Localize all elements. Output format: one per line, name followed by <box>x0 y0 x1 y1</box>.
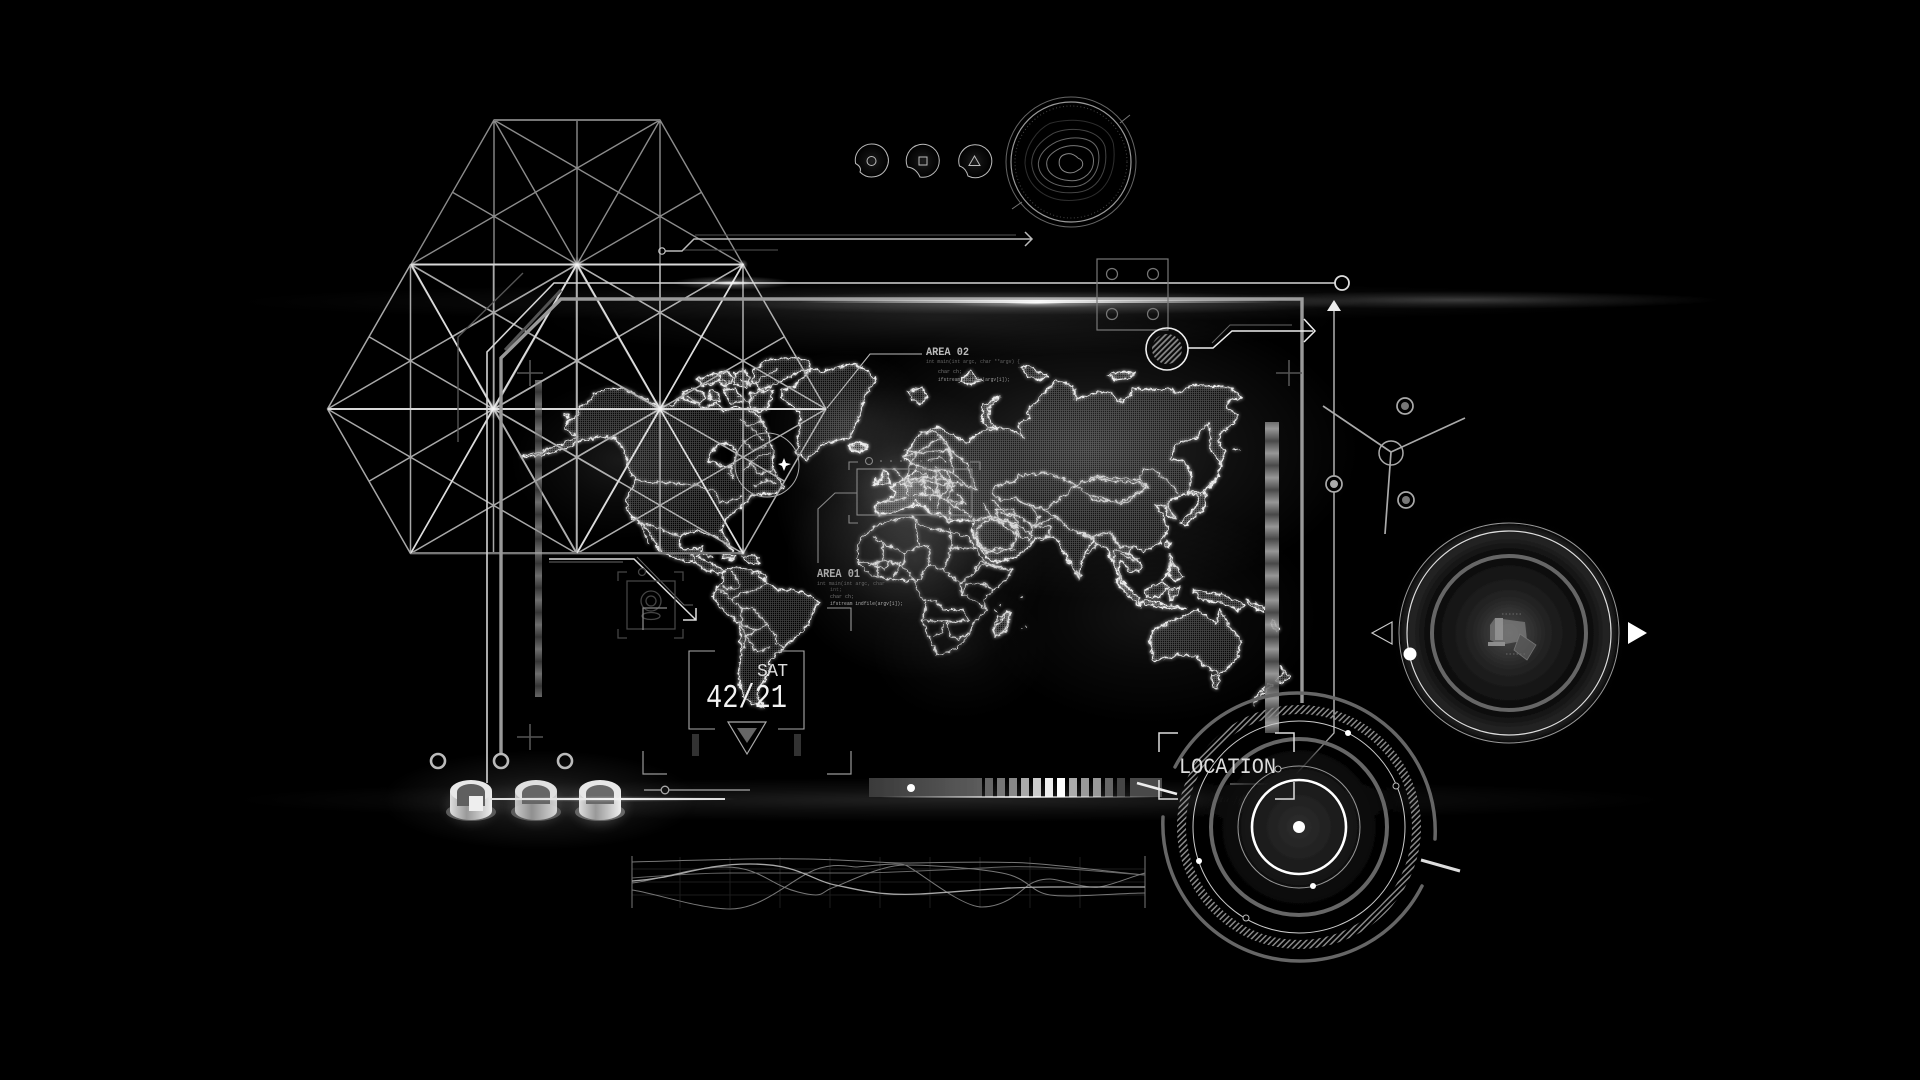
top arrow connector <box>659 232 1032 254</box>
Europe bright cluster <box>855 450 965 530</box>
targeting circle over North America <box>735 433 799 497</box>
AREA 02 label <box>827 347 1020 408</box>
pointer arrow to map pin <box>549 557 696 620</box>
AREA 01 label: char ch; <box>830 594 854 600</box>
SAT date panel: SAT <box>757 662 788 682</box>
frame and connector lines <box>458 273 1343 783</box>
AREA 02 label: ifstream indfile(argv[1]); <box>938 377 1010 383</box>
icon: target node 3 <box>1398 492 1414 508</box>
AREA 01 label: int; <box>830 587 842 593</box>
slider <box>644 786 750 794</box>
map coastlines <box>520 357 1290 707</box>
cylinder 1 <box>441 780 501 828</box>
background glow behind map <box>230 282 1720 850</box>
vertical arrow <box>1230 300 1341 784</box>
trident connector <box>1323 398 1465 534</box>
icon: satellite object <box>1488 614 1536 660</box>
AREA 02 label: char ch; <box>938 369 962 375</box>
AREA 02 label: AREA 02 <box>926 347 969 359</box>
striped vertical bars <box>535 380 1279 733</box>
glow line through cylinders <box>480 796 740 802</box>
location label: LOCATION <box>1179 755 1276 780</box>
wave chart <box>632 856 1145 909</box>
horizontal lens flares <box>672 276 1370 315</box>
SAT date panel <box>643 651 851 774</box>
icon: square <box>906 144 940 178</box>
bolted plate <box>1097 259 1168 330</box>
panel: world map <box>520 357 1290 707</box>
AREA 02 label: int main(int argc, char **argv) { <box>926 359 1020 365</box>
AREA 01 label: AREA 01 <box>817 568 860 581</box>
icon: location pin panel <box>618 568 683 638</box>
viewer dial <box>1372 513 1647 753</box>
icon: target node 1 <box>1397 398 1413 414</box>
location label <box>1137 733 1294 799</box>
icon: right triangle <box>1628 622 1647 644</box>
location radar disc <box>1163 693 1460 961</box>
icon: circle <box>855 144 889 178</box>
Europe selection box <box>849 458 980 523</box>
glass cylinder indicators <box>441 780 632 830</box>
hexagon lattice <box>328 120 826 559</box>
icon: triangle <box>958 144 992 178</box>
AREA 01 label <box>817 493 903 631</box>
AREA 01 label: ifstream indfile(argv[1]); <box>830 601 903 607</box>
cylinder 2 <box>506 780 566 828</box>
progress bar <box>869 778 1162 798</box>
AREA 01 label: int main(int argc, char <box>817 581 885 587</box>
SAT date panel: 42/21 <box>706 680 787 717</box>
hatched node with arrow <box>1146 319 1315 370</box>
rings above cylinders <box>431 754 572 768</box>
contour radar <box>1006 97 1136 227</box>
icon: target node 2 <box>1326 476 1342 492</box>
icon: left triangle <box>1372 622 1392 644</box>
cylinder 3 <box>568 780 632 830</box>
shape icons row <box>855 144 992 178</box>
plus markers <box>517 360 1302 750</box>
map land fill <box>520 357 1290 707</box>
connector end ring <box>1335 276 1349 290</box>
map country borders <box>636 370 1180 655</box>
